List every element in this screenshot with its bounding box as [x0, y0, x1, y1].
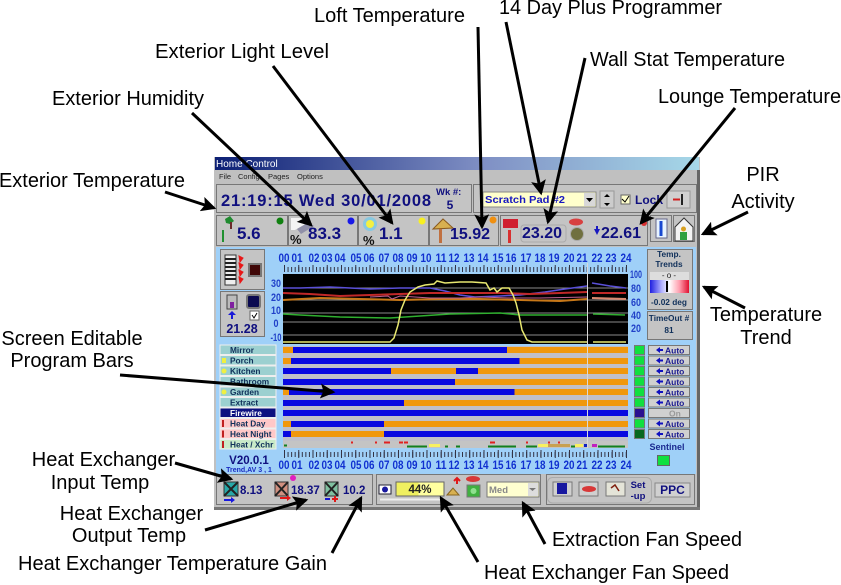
current time cursor [586, 263, 588, 448]
hour axis top: 23 [606, 253, 616, 265]
temperature trends panel: Trends [655, 259, 683, 269]
hour axis top: 20 [564, 253, 574, 265]
hour axis bottom: 11 [436, 460, 447, 472]
temperature gain reading [325, 482, 365, 502]
hour axis top: 00 [278, 253, 290, 265]
timeout panel: 81 [664, 325, 674, 335]
hour axis top: 17 [520, 253, 532, 265]
arrow: exterior temperature [165, 192, 214, 208]
sentinel indicator: Sentinel [649, 442, 685, 452]
hour axis top: 02 [308, 253, 320, 265]
indoor temperature panel: 21.28 [226, 322, 258, 336]
button: extract: Extract [230, 398, 258, 408]
label: lounge temperature: Lounge Temperature [658, 86, 841, 108]
hour axis bottom: 13 [464, 460, 474, 472]
version label: Trend,AV 3 , 1 [226, 467, 272, 474]
left temperature axis: 30 [271, 278, 281, 290]
hour axis bottom: 15 [492, 460, 504, 472]
hour axis top: 16 [506, 253, 516, 265]
label: temperature trend: Temperature [710, 304, 822, 326]
arrow: temperature gain [332, 498, 361, 553]
temperature trends panel: -0.02 deg [651, 297, 687, 307]
hour axis bottom: 18 [534, 460, 546, 472]
bottom status bar [216, 474, 696, 506]
button: firewire: Firewire [230, 408, 262, 418]
lounge temperature reading: 22.61 [601, 225, 641, 242]
hour axis bottom: 10 [420, 460, 432, 472]
bar: heat night [283, 431, 628, 437]
label: loft temperature: Loft Temperature [314, 5, 465, 27]
arrow: temperature trend [704, 287, 745, 308]
bar: bathroom [283, 379, 628, 385]
bar: firewire [283, 410, 628, 416]
bar: kitchen [283, 368, 628, 374]
hour axis top: 15 [492, 253, 504, 265]
arrow: PIR activity [703, 212, 748, 234]
label: temperature trend: Trend [740, 327, 792, 349]
clock panel: Wk #: [436, 187, 461, 198]
arrow: fan speed [441, 498, 478, 562]
output temperature reading [275, 475, 320, 501]
label: exterior humidity: Exterior Humidity [52, 88, 204, 110]
clock panel [216, 184, 472, 212]
channel name buttons [220, 345, 276, 450]
hour axis top: 22 [592, 253, 602, 265]
button: heat day: Heat Day [230, 418, 266, 428]
label: extraction fan speed: Extraction Fan Speed [552, 529, 742, 551]
fan speed gauge [380, 482, 444, 500]
label: heat exchanger input temp: Input Temp [51, 472, 149, 494]
auto override buttons: Auto [665, 430, 684, 440]
hour axis top: 14 [478, 253, 489, 265]
exterior temperature reading [223, 216, 284, 243]
label: heat exchanger output temp [60, 503, 204, 547]
menu bar: Pages [268, 172, 290, 181]
temperature trends panel: - o - [662, 271, 676, 280]
hour axis top: 07 [378, 253, 390, 265]
label: heat exchanger input temp: Heat Exchanger [32, 449, 176, 471]
fan speed panel [376, 474, 540, 504]
hour axis top: 21 [576, 253, 588, 265]
hour axis top: 13 [464, 253, 474, 265]
hour axis bottom: 00 [278, 460, 290, 472]
wall stat temperature reading: 23.20 [522, 225, 562, 242]
screen editable program bars [283, 346, 628, 448]
hour axis bottom: 20 [564, 460, 574, 472]
tool buttons panel [546, 474, 694, 504]
arrow: exterior light level [273, 66, 392, 223]
title bar [215, 157, 699, 170]
bar: mirror [283, 347, 628, 353]
bar: porch [283, 358, 628, 364]
menu bar: File [219, 172, 231, 181]
auto override buttons: Auto [665, 346, 684, 356]
button: setup [631, 480, 646, 502]
timeout panel [648, 312, 692, 340]
timeout panel: TimeOut # [649, 313, 690, 323]
output temperature reading: 18.37 [291, 485, 320, 497]
fan icon [379, 485, 391, 494]
hour axis top: 18 [534, 253, 546, 265]
sensor row [216, 216, 694, 248]
right percent axis: 20 [631, 323, 641, 335]
version label [226, 455, 272, 474]
clock panel: 5 [447, 198, 454, 212]
hour axis bottom: 07 [378, 460, 390, 472]
bar: garden [283, 389, 628, 395]
bar: heat day [283, 421, 628, 427]
thermometer button [656, 219, 667, 238]
label: heat exchanger temperature gain: Heat Exchanger Temperature Gain [18, 553, 327, 575]
hour axis bottom: 06 [364, 460, 374, 472]
arrow: program bars [120, 375, 333, 392]
label: exterior light level: Exterior Light Level [155, 41, 329, 63]
label: exterior temperature: Exterior Temperature [0, 170, 185, 192]
label: heat exchanger fan speed: Heat Exchanger Fan Speed [484, 562, 729, 584]
programmer selector: Scratch Pad #2 [485, 194, 565, 206]
programmer selector [474, 184, 696, 212]
indoor temperature panel [220, 292, 264, 336]
extraction fan controls [466, 476, 539, 497]
title bar: Home Control [216, 159, 278, 170]
right percent axis [630, 269, 642, 335]
hour axis top: 12 [448, 253, 460, 265]
button: tool [606, 482, 625, 496]
hour axis bottom: 22 [592, 460, 602, 472]
exterior temperature reading: 5.6 [237, 224, 261, 243]
hour axis top: 08 [392, 253, 404, 265]
auto override buttons: Auto [665, 366, 684, 376]
exterior humidity reading: 83.3 [308, 224, 341, 243]
wall stat temperature reading [503, 218, 584, 243]
hour axis top: 10 [420, 253, 432, 265]
hour axis top: 03 [322, 253, 332, 265]
temperature trends panel [648, 249, 692, 310]
label: screen editable program bars [1, 328, 143, 372]
left temperature axis [270, 278, 282, 344]
PIR activity button [675, 218, 693, 241]
hour axis bottom: 24 [620, 460, 632, 472]
programmer selector: Lock [635, 193, 663, 207]
application window [214, 157, 700, 510]
arrow: extraction fan speed [523, 503, 545, 544]
label: screen editable program bars: Program Bars [10, 350, 134, 372]
button: kitchen: Kitchen [230, 366, 260, 376]
auto override buttons: Auto [665, 356, 684, 366]
auto override buttons: Auto [665, 398, 684, 408]
hour axis bottom: 23 [606, 460, 616, 472]
menu bar: Options [297, 172, 323, 181]
label: PIR activity: Activity [731, 191, 795, 213]
status indicators [634, 346, 644, 438]
button: mirror: Mirror [230, 345, 255, 355]
input temperature reading [224, 482, 262, 503]
loft temperature reading [433, 216, 496, 243]
hour axis top: 09 [406, 253, 418, 265]
label: temperature trend [710, 304, 822, 349]
hour axis top: 19 [548, 253, 560, 265]
exterior light level reading: % [363, 233, 375, 248]
arrow: loft temperature [478, 27, 482, 227]
hour axis bottom: 05 [350, 460, 362, 472]
exterior light level reading [363, 217, 426, 248]
version label: V20.0.1 [229, 455, 269, 467]
button: eye [579, 482, 598, 496]
temperature line chart [283, 274, 628, 344]
hour axis top [278, 253, 632, 270]
hour axis top: 01 [292, 253, 303, 265]
arrow: 14 day programmer [506, 22, 541, 193]
lounge temperature reading [594, 220, 647, 242]
hour axis bottom: 03 [322, 460, 332, 472]
auto override buttons: Auto [665, 388, 684, 398]
callout arrows [120, 22, 748, 562]
menu bar [219, 172, 323, 181]
clock panel: 21:19:15 Wed 30/01/2008 [221, 192, 431, 210]
button: PPC: PPC [660, 483, 685, 497]
button: setup: -up [631, 491, 646, 502]
fan speed gauge: 44% [408, 484, 432, 496]
hour axis bottom: 19 [548, 460, 560, 472]
left temperature axis: 0 [274, 318, 278, 330]
menu bar: Config [238, 172, 260, 181]
auto override buttons [648, 346, 690, 440]
auto override buttons: Auto [665, 419, 684, 429]
arrow: lounge temperature [641, 108, 735, 223]
hour axis top: 06 [364, 253, 374, 265]
temperature gain reading: 10.2 [343, 485, 365, 497]
label: screen editable program bars: Screen Editable [1, 328, 143, 350]
left temperature axis: 20 [271, 292, 281, 304]
auto override buttons: Auto [665, 377, 684, 387]
hour axis bottom: 09 [406, 460, 418, 472]
heat exchanger readings panel [216, 474, 372, 504]
label: heat exchanger output temp: Output Temp [72, 525, 186, 547]
heating status panel [220, 250, 264, 290]
arrow: input temp [175, 463, 231, 479]
label: heat exchanger output temp: Heat Exchanger [60, 503, 204, 525]
right percent axis: 80 [631, 283, 641, 295]
bar: extract [283, 400, 628, 406]
temperature trends panel: Temp. [657, 249, 681, 259]
left temperature axis: 10 [271, 305, 281, 317]
button: heat exchanger: Heat / Xchr [230, 440, 274, 450]
right percent axis: 100 [630, 269, 642, 281]
arrow: wall stat temperature [548, 58, 585, 222]
label: wall stat temperature: Wall Stat Temperature [590, 49, 785, 71]
label: heat exchanger input temp [32, 449, 176, 494]
sentinel indicator [649, 442, 685, 466]
hour axis bottom: 04 [334, 460, 346, 472]
left temperature axis: -10 [270, 332, 282, 344]
label: PIR activity: PIR [746, 164, 780, 186]
hour axis bottom [278, 454, 632, 472]
hour axis top: 24 [620, 253, 632, 265]
button: setup: Set [631, 480, 646, 491]
hour axis top: 04 [334, 253, 346, 265]
extraction fan controls: Med [489, 485, 508, 496]
auto override buttons: On [669, 408, 681, 418]
right percent axis: 40 [631, 310, 641, 322]
button: bathroom: Bathroom [230, 376, 269, 386]
exterior humidity reading [290, 218, 354, 247]
hour axis bottom: 02 [308, 460, 320, 472]
chart background [216, 247, 696, 474]
bar: heat exchanger status strip [283, 441, 628, 448]
hour axis bottom: 21 [576, 460, 588, 472]
button: heat night: Heat Night [230, 429, 272, 439]
hour axis top: 11 [436, 253, 447, 265]
right percent axis: 60 [631, 297, 641, 309]
exterior humidity reading: % [290, 232, 302, 247]
hour axis top: 05 [350, 253, 362, 265]
hour axis bottom: 08 [392, 460, 404, 472]
arrow: output temp [205, 500, 306, 530]
loft temperature reading: 15.92 [450, 226, 490, 243]
hour axis bottom: 16 [506, 460, 516, 472]
hour axis bottom: 14 [478, 460, 489, 472]
arrow: exterior humidity [192, 113, 311, 225]
hour axis bottom: 12 [448, 460, 460, 472]
button: garden: Garden [230, 387, 259, 397]
hour axis bottom: 17 [520, 460, 532, 472]
heat exchanger fan icon [447, 478, 460, 495]
label: PIR activity [731, 164, 795, 213]
button: fan [553, 482, 572, 496]
exterior light level reading: 1.1 [379, 224, 403, 243]
hour axis bottom: 01 [292, 460, 303, 472]
button: porch: Porch [230, 356, 254, 366]
input temperature reading: 8.13 [240, 485, 262, 497]
